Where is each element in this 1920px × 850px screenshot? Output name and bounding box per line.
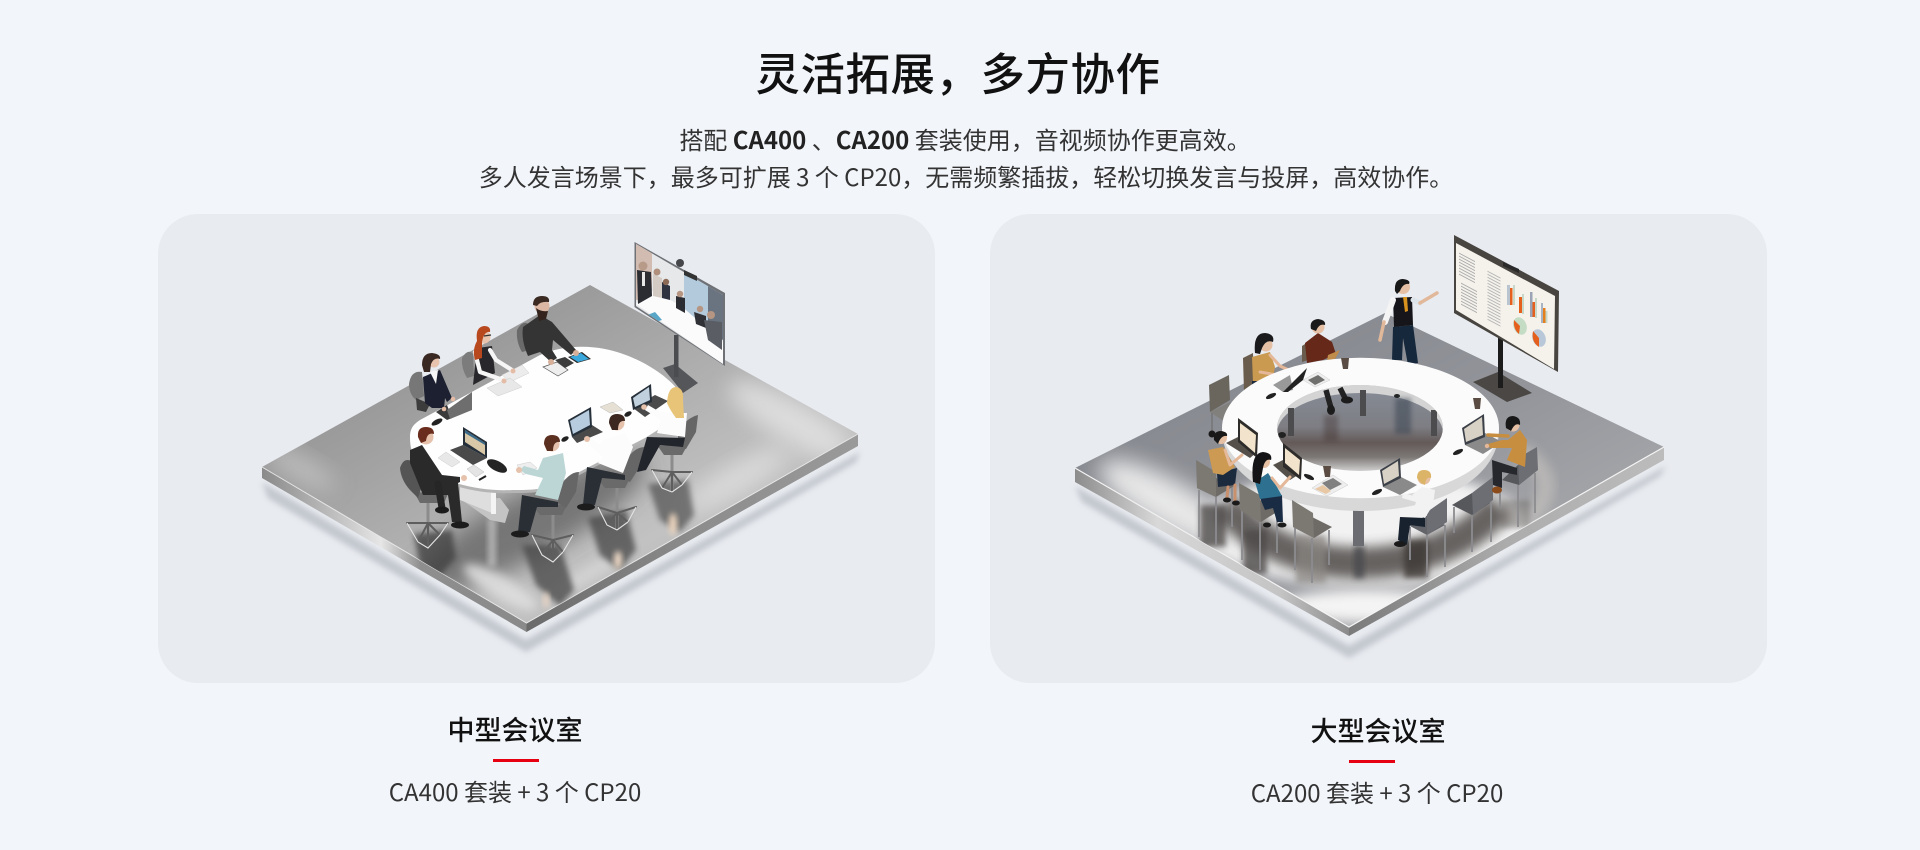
person: man in orange sweater with chair — [1485, 416, 1538, 527]
laptops — [436, 384, 668, 465]
platform shadow — [262, 452, 860, 652]
red divider left — [493, 759, 539, 762]
panel: medium meeting room — [158, 214, 935, 683]
display stand — [1473, 338, 1532, 402]
display stand — [663, 335, 698, 393]
person: woman in mustard top — [1252, 333, 1293, 386]
person: blond man with chair — [1394, 470, 1447, 577]
person: man in dark suit with chair — [400, 427, 469, 548]
person: woman in dark suit — [409, 353, 455, 412]
red divider right — [1349, 760, 1395, 763]
person: red haired woman — [462, 326, 516, 385]
person: seated woman in blue with chair — [1239, 452, 1290, 570]
webcam — [1503, 262, 1519, 273]
presentation display — [1454, 235, 1559, 372]
subtitle line 1: 搭配 CA400 、CA200 套装使用，音视频协作更高效。 — [679, 121, 1251, 156]
oval conference table — [410, 347, 683, 523]
laptops — [1226, 368, 1502, 495]
person: man in maroon sweater — [1305, 319, 1340, 363]
caption: large room: 大型会议室 — [1310, 710, 1446, 749]
platform shadow — [1075, 466, 1666, 658]
cups — [1323, 358, 1481, 477]
documents and remotes — [1265, 372, 1464, 496]
hole floor view — [1277, 385, 1443, 471]
webcam — [676, 259, 697, 281]
person: man in pale blue shirt with chair — [511, 435, 579, 562]
documents and tablet — [431, 352, 633, 480]
empty bar chair — [1292, 500, 1332, 583]
title: 灵活拓展，多方协作 — [756, 38, 1160, 103]
person: blonde woman with chair — [637, 387, 698, 492]
panel: large meeting room — [990, 214, 1767, 683]
ring shaped conference table — [1222, 358, 1499, 498]
metal platform — [1075, 313, 1664, 636]
person: seated woman with bun and chair — [1196, 430, 1242, 545]
floor reflections — [259, 368, 861, 618]
ring table side and legs — [1222, 430, 1499, 546]
empty bar chair right — [1452, 477, 1493, 552]
caption detail: medium room: CA400 套装 + 3 个 CP20 — [389, 773, 641, 808]
caption: medium room: 中型会议室 — [448, 709, 582, 748]
subtitle line 2: 多人发言场景下，最多可扩展 3 个 CP20，无需频繁插拔，轻松切换发言与投屏，高效协作。 — [479, 158, 1453, 193]
chair backs behind table — [1243, 342, 1308, 392]
caption detail: large room: CA200 套装 + 3 个 CP20 — [1251, 774, 1503, 809]
person: bearded man — [517, 296, 579, 365]
presenter — [1380, 279, 1437, 365]
far side chair — [1209, 375, 1236, 432]
floor reflections — [1089, 444, 1546, 622]
metal platform — [262, 285, 858, 632]
video wall display — [634, 242, 725, 366]
person: man in white shirt with chair — [577, 414, 644, 530]
